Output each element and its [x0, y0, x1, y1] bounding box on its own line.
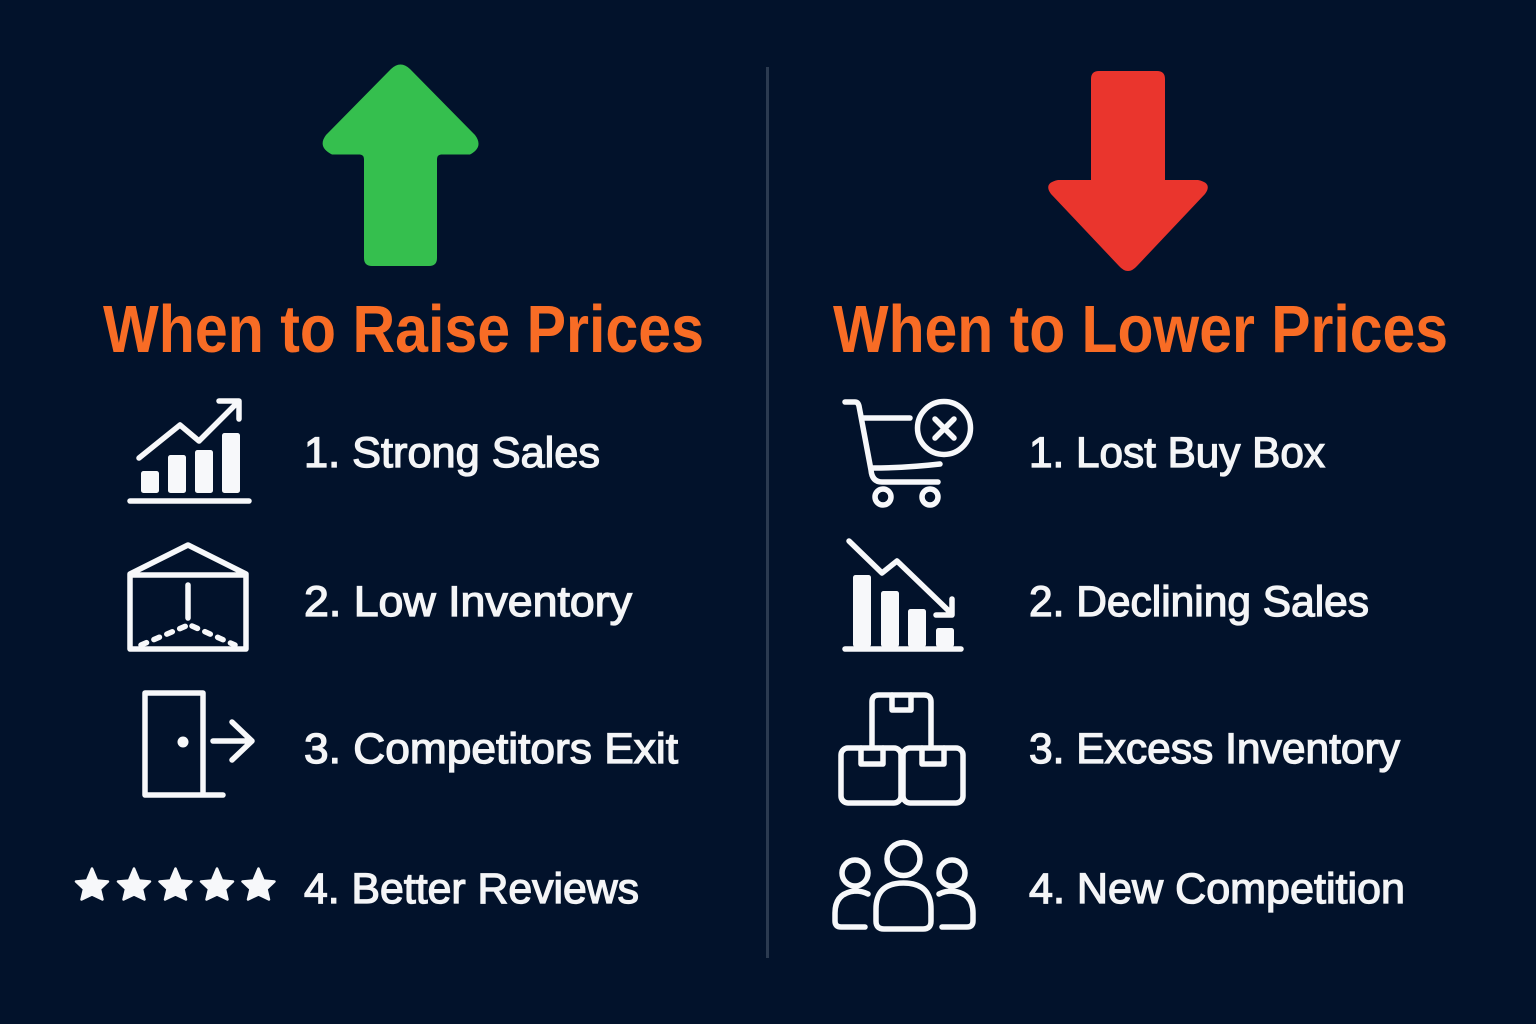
item: competitors exit [145, 693, 678, 795]
icon: five stars [76, 868, 274, 900]
label: competitors exit: 3. Competitors Exit [304, 725, 678, 773]
label: excess inventory: 3. Excess Inventory [1029, 725, 1400, 773]
label: better reviews: 4. Better Reviews [304, 865, 639, 913]
icon: green up arrow [323, 64, 479, 266]
label: new competition: 4. New Competition [1029, 865, 1405, 913]
panel: when to raise prices [76, 64, 704, 913]
icon: rising bar chart [130, 401, 249, 501]
heading: when to lower prices: When to Lower Prices [833, 292, 1448, 367]
heading: when to raise prices: When to Raise Prices [103, 292, 704, 367]
icon: group of people [835, 842, 973, 929]
label: declining sales: 2. Declining Sales [1029, 578, 1369, 626]
icon: stacked boxes [841, 695, 963, 803]
item: excess inventory [841, 695, 1400, 803]
label: low inventory: 2. Low Inventory [304, 578, 633, 626]
item: strong sales [130, 401, 600, 501]
item: low inventory [130, 545, 633, 649]
item: new competition [835, 842, 1405, 929]
icon: exit door with arrow [145, 693, 252, 795]
icon: empty warehouse [130, 545, 246, 649]
icon: shopping cart with x [845, 402, 970, 505]
icon: red down arrow [1048, 71, 1208, 271]
item: better reviews [76, 865, 639, 913]
label: lost buy box: 1. Lost Buy Box [1029, 429, 1325, 477]
panel: when to lower prices [833, 71, 1448, 929]
label: strong sales: 1. Strong Sales [304, 429, 600, 477]
icon: falling bar chart [845, 541, 961, 649]
item: lost buy box [845, 402, 1325, 505]
item: declining sales [845, 541, 1369, 649]
